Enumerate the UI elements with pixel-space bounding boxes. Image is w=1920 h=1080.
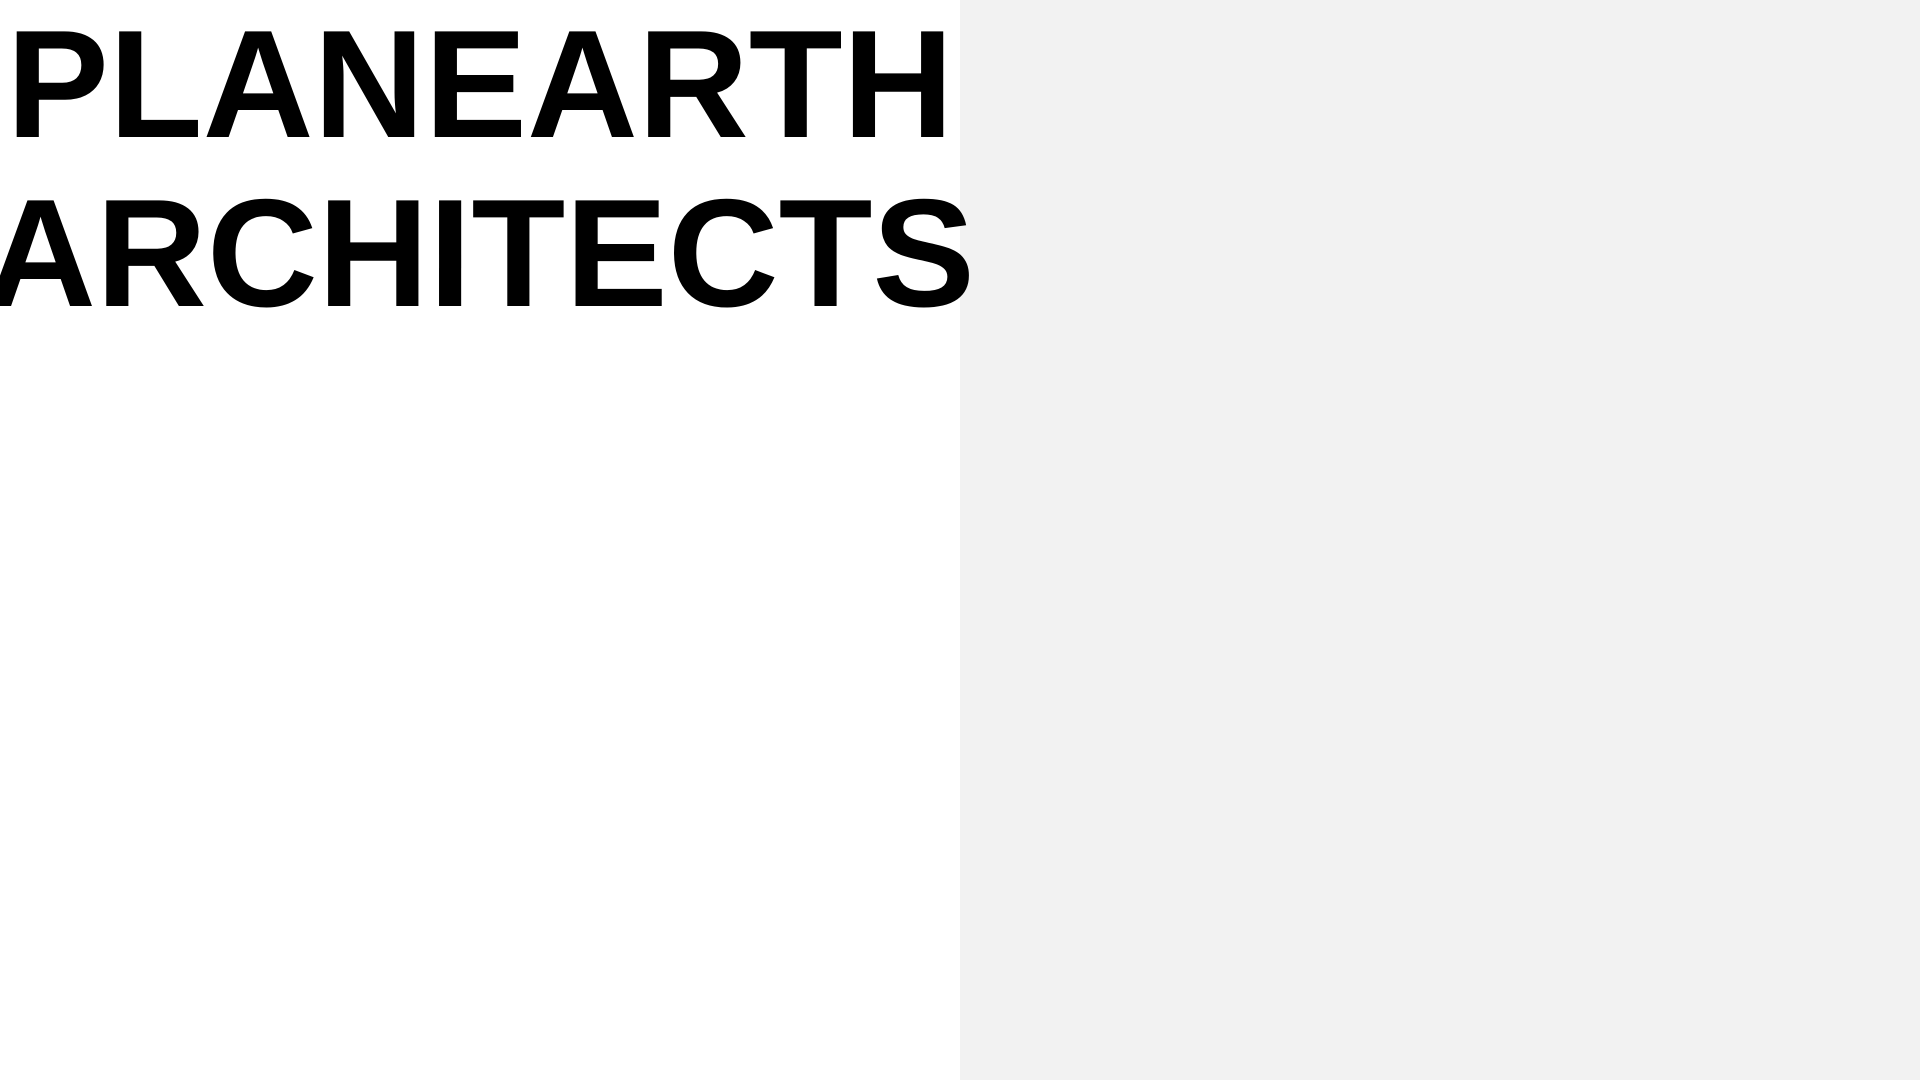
title: [0, 0, 975, 339]
panel: white left half: [0, 0, 960, 1080]
title line: ARCHITECTS: ARCHITECTS: [0, 167, 975, 339]
panel: grey right half: [960, 0, 1920, 1080]
title line: PLANEARTH: PLANEARTH: [6, 0, 954, 170]
